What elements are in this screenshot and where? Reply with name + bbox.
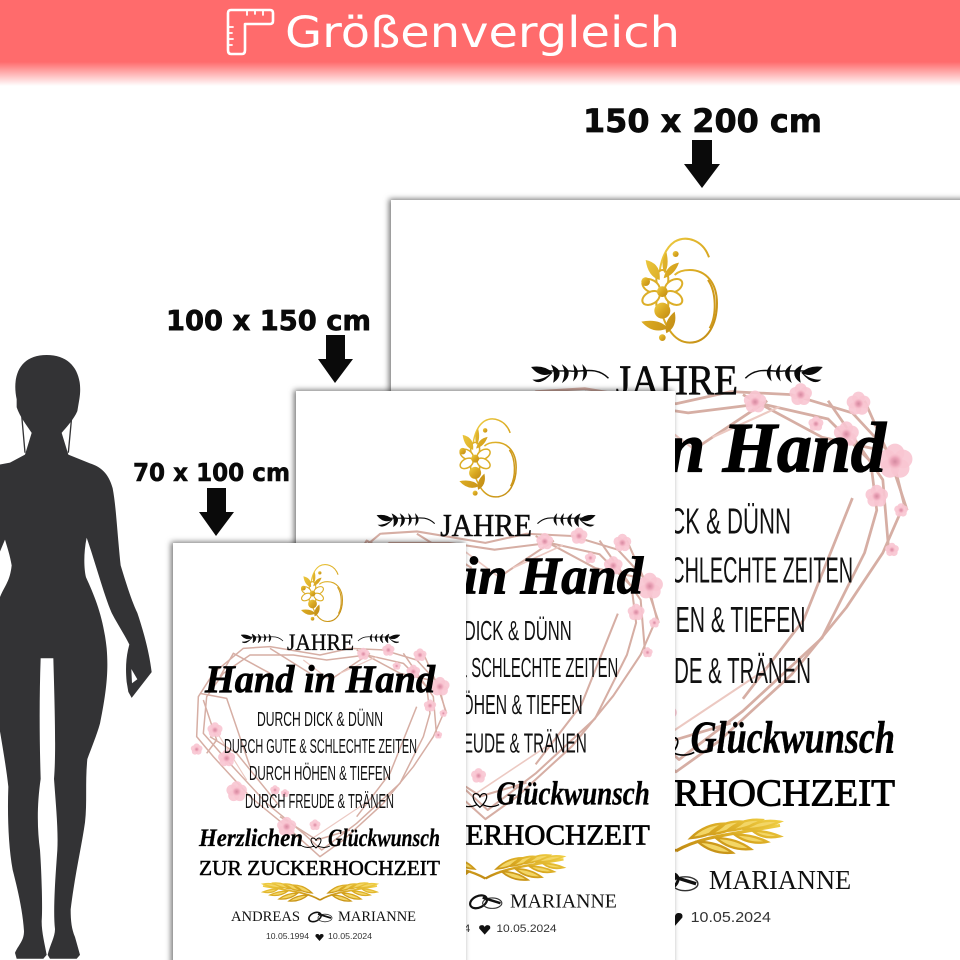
name right: MARIANNE [338, 909, 416, 925]
poster sheet [391, 200, 960, 960]
congratulation line: Herzlichen [319, 775, 462, 813]
occasion line: ZUR ZUCKERHOCHZEIT [320, 819, 650, 851]
golden wheat right [485, 855, 563, 880]
arrow: 150 x 200 cm [684, 140, 720, 188]
heart wreath [308, 527, 663, 819]
verses: DURCH GUTE & SCHLECHTE ZEITEN [354, 652, 618, 683]
verses [501, 500, 853, 691]
date right: 10.05.2024 [691, 910, 771, 926]
congratulation line: Glückwunsch [496, 775, 650, 813]
header banner [0, 0, 960, 86]
verses [354, 615, 618, 758]
leaf ornament left [532, 365, 608, 382]
script heading: Hand in Hand [465, 409, 887, 487]
date left: 10.05.1994 [577, 910, 656, 926]
verses: DURCH FREUDE & TRÄNEN [245, 791, 394, 813]
verses: DURCH GUTE & SCHLECHTE ZEITEN [224, 736, 417, 758]
poster: 100 x 150 cm [296, 391, 675, 960]
icon: golden number six [640, 239, 717, 343]
poster sheet [296, 391, 675, 960]
icon: heart [315, 934, 324, 941]
golden wheat left [572, 820, 676, 853]
leaf ornament left [241, 634, 283, 643]
heading: Jahre: JAHRE [616, 359, 738, 405]
congratulation line [454, 711, 895, 762]
icon: heart [668, 913, 683, 926]
heart wreath [440, 383, 912, 772]
poster: 150 x 200 cm [391, 200, 960, 960]
script heading: Hand in Hand [204, 658, 435, 701]
verses [224, 709, 417, 813]
name left: ANDREAS [363, 890, 458, 912]
heart wreath [191, 644, 450, 857]
heading: Jahre: JAHRE [440, 508, 532, 543]
poster content [308, 419, 663, 935]
name left: ANDREAS [231, 909, 300, 925]
name left: ANDREAS [514, 865, 640, 895]
verses: DURCH DICK & DÜNN [561, 500, 791, 541]
golden wheat left [407, 855, 485, 880]
golden wheat right [676, 820, 780, 853]
leaf ornament right [358, 634, 400, 643]
arrow: 70 x 100 cm [199, 488, 234, 536]
heading: Jahre: JAHRE [287, 630, 354, 655]
name right: MARIANNE [510, 890, 617, 912]
verses: DURCH HÖHEN & TIEFEN [249, 763, 391, 785]
size label: 100 x 150 cm: 100 x 150 cm [166, 304, 371, 337]
occasion line: ZUR ZUCKERHOCHZEIT [199, 856, 440, 880]
icon: rings [653, 870, 698, 894]
icon: heart [479, 925, 490, 935]
verses: DURCH DICK & DÜNN [257, 709, 383, 731]
congratulation line [198, 825, 440, 852]
name right: MARIANNE [709, 865, 851, 895]
golden wheat right [320, 883, 377, 901]
script heading: Hand in Hand [327, 546, 644, 606]
occasion line: ZUR ZUCKERHOCHZEIT [455, 772, 895, 814]
human silhouette [0, 355, 152, 959]
date right: 10.05.2024 [328, 932, 373, 941]
icon: golden number six [300, 565, 342, 621]
date left: 10.05.1994 [266, 932, 310, 941]
date left: 10.05.1994 [411, 923, 470, 935]
congratulation line: Herzlichen [454, 711, 645, 762]
congratulation line: Herzlichen [198, 825, 303, 852]
poster content [191, 565, 450, 941]
arrow: 100 x 150 cm [318, 335, 353, 383]
size label: 70 x 100 cm: 70 x 100 cm [133, 458, 290, 487]
congratulation line: Glückwunsch [691, 711, 895, 762]
leaf ornament right [537, 514, 595, 526]
icon: ruler [228, 10, 273, 54]
verses: DURCH HÖHEN & TIEFEN [388, 689, 583, 720]
poster: 70 x 100 cm [173, 543, 466, 960]
congratulation line [319, 775, 650, 813]
icon: rings [468, 893, 502, 911]
verses: DURCH FREUDE & TRÄNEN [383, 727, 587, 758]
leaf ornament right [745, 365, 822, 382]
icon: rings [307, 910, 332, 924]
icon: golden number six [458, 419, 516, 497]
title: Größenvergleich [285, 8, 680, 58]
poster content [440, 239, 912, 926]
size label: 150 x 200 cm: 150 x 200 cm [583, 102, 822, 140]
poster sheet [173, 543, 466, 960]
golden wheat left [263, 883, 320, 901]
verses: DURCH DICK & DÜNN [399, 615, 572, 646]
congratulation line: Glückwunsch [328, 825, 440, 852]
date right: 10.05.2024 [496, 923, 557, 935]
leaf ornament left [377, 514, 435, 526]
